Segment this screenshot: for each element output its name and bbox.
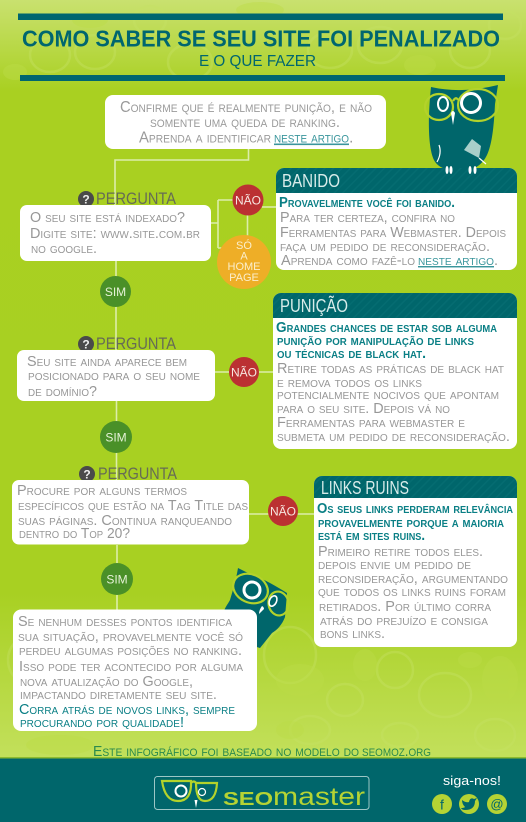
panel: punição: Retire todas as práticas de black hat (277, 361, 504, 377)
node: não 2 (229, 357, 259, 387)
node: só a home page: PAGE (229, 272, 259, 284)
panel: banido: Para ter certeza, confira no (280, 210, 455, 226)
panel: punição: ou técnicas de black hat. (277, 346, 426, 362)
panel: punição: PUNIÇÃO (280, 295, 348, 316)
panel: banido: faça um pedido de reconsideração. (280, 239, 490, 255)
question box 3: dentro do Top 20? (19, 526, 130, 542)
intro box (105, 95, 386, 149)
intro box: somente uma queda de ranking. (150, 114, 340, 131)
panel: links ruins: Os seus links perderam relevância (317, 501, 513, 517)
node: sim 2: SIM (105, 430, 127, 444)
panel: punição: punição por manipulação de links (277, 333, 474, 349)
logo: seomaster: master (273, 783, 365, 811)
footer band (0, 757, 526, 822)
panel: punição: para o seu site. Depois vá no (277, 401, 450, 417)
question box 2: posicionado para o seu nome (28, 368, 200, 384)
social links: siga-nos! (443, 773, 501, 788)
panel: banido: Aprenda como fazê-lo (281, 253, 415, 269)
heading: pergunta 1: ? (82, 192, 90, 206)
node: não 1: NÃO (235, 194, 261, 208)
flow connector lines (115, 149, 315, 610)
node: só a home page: SÓ (236, 239, 252, 252)
final advice box: nova atualização do Google, (20, 674, 193, 690)
icon: owl with glasses (425, 85, 498, 171)
node: sim 3: SIM (106, 572, 128, 586)
final advice box: procurando por qualidade! (20, 715, 184, 731)
title block: E O QUE FAZER (199, 53, 316, 70)
node: não 3: NÃO (270, 504, 296, 518)
final advice box: Se nenhum desses pontos identifica (18, 614, 232, 630)
node: não 1 (232, 184, 264, 216)
panel: punição: submeta um pedido de reconsideração. (277, 429, 510, 445)
node: não 2: NÃO (231, 366, 257, 380)
panel: punição (273, 293, 517, 449)
question box 2: de domínio? (28, 384, 97, 400)
panel: links ruins: LINKS RUINS (321, 478, 409, 498)
intro box: Aprenda a identificar (139, 130, 271, 146)
icon: owl feet (446, 166, 476, 174)
icon: email: @ (490, 796, 504, 812)
question box 1: Digite site: www.site.com.br (30, 226, 200, 242)
source credit: Este infográfico foi baseado no modelo do (93, 743, 359, 760)
icon: twitter (459, 794, 479, 814)
heading: pergunta 3: PERGUNTA (98, 465, 177, 483)
question box 2: Seu site ainda aparece bem (27, 354, 187, 370)
panel: links ruins: atrás do prejuízo e consiga (320, 613, 488, 629)
final advice box: Corra atrás de novos links, sempre (19, 702, 235, 718)
panel: links ruins: está em sites ruins. (318, 528, 425, 544)
panel: banido (276, 166, 517, 270)
final advice box: sua situação, provavelmente você só (18, 629, 243, 645)
icon: tilted owl (222, 568, 290, 648)
panel: banido: Ferramentas para Webmaster. Depois (280, 225, 506, 241)
question box 3: Procure por alguns termos (17, 483, 187, 499)
node: sim 2 (100, 421, 132, 453)
heading: pergunta 3: ? (83, 468, 91, 482)
heading: pergunta 2: PERGUNTA (96, 335, 176, 353)
logo: seomaster (154, 776, 369, 811)
panel: banido: neste artigo (418, 253, 494, 269)
panel: punição: potencialmente nocivos que apontam (277, 387, 499, 403)
intro box: Confirme que é realmente punição, e não (120, 99, 372, 116)
heading: pergunta 2: ? (82, 338, 90, 352)
panel: links ruins: reconsideração, argumentando (318, 571, 508, 587)
icon: facebook: f (440, 796, 444, 812)
intro box: neste artigo (274, 130, 349, 146)
panel: links ruins: provavelmente porque a maioria (318, 515, 504, 531)
panel: links ruins: retirados. Por último corra (319, 599, 491, 615)
question box 3: suas páginas. Continua ranqueando (18, 513, 232, 529)
logo: seomaster: SEO (223, 789, 273, 809)
question box 2 (17, 350, 215, 401)
social links (432, 773, 507, 814)
panel: links ruins: que todos os links ruins foram (318, 584, 506, 600)
question box 1 (20, 205, 211, 261)
node: sim 1: SIM (105, 285, 126, 299)
panel: banido: Provavelmente você foi banido. (279, 195, 455, 211)
panel: links ruins: depois envie um pedido de (318, 557, 471, 573)
final advice box: perdeu algumas posições no ranking. (19, 643, 242, 659)
node: sim 1 (100, 276, 131, 307)
question box 1: no google. (31, 241, 97, 257)
title block: COMO SABER SE SEU SITE FOI PENALIZADO (22, 26, 500, 52)
question box 3: específicos que estão na Tag Title das (18, 498, 248, 514)
question box 3 (12, 480, 249, 544)
panel: links ruins (314, 476, 517, 647)
node: só a home page: A (240, 250, 248, 262)
panel: punição: Grandes chances de estar sob alguma (276, 320, 497, 336)
panel: links ruins: Primeiro retire todos eles. (318, 544, 483, 560)
question box 1: O seu site está indexado? (30, 210, 185, 226)
panel: punição: Ferramentas para webmaster e (277, 415, 465, 431)
panel: banido: BANIDO (282, 171, 340, 191)
title block (18, 14, 505, 81)
final advice box: impactando diretamente seu site. (20, 687, 217, 703)
final advice box: Isso pode ter acontecido por alguma (19, 659, 243, 675)
final advice box (13, 610, 257, 731)
node: sim 3 (101, 563, 133, 595)
heading: pergunta 1: PERGUNTA (96, 190, 176, 208)
panel: punição: e remova todos os links (277, 375, 422, 391)
source credit: seomoz.org (362, 743, 431, 760)
panel: banido: . (494, 253, 498, 269)
node: só a home page (217, 235, 271, 289)
panel: links ruins: bons links. (320, 626, 385, 642)
node: não 3 (268, 496, 298, 526)
intro box: . (349, 130, 353, 146)
node: só a home page: HOME (228, 261, 260, 273)
